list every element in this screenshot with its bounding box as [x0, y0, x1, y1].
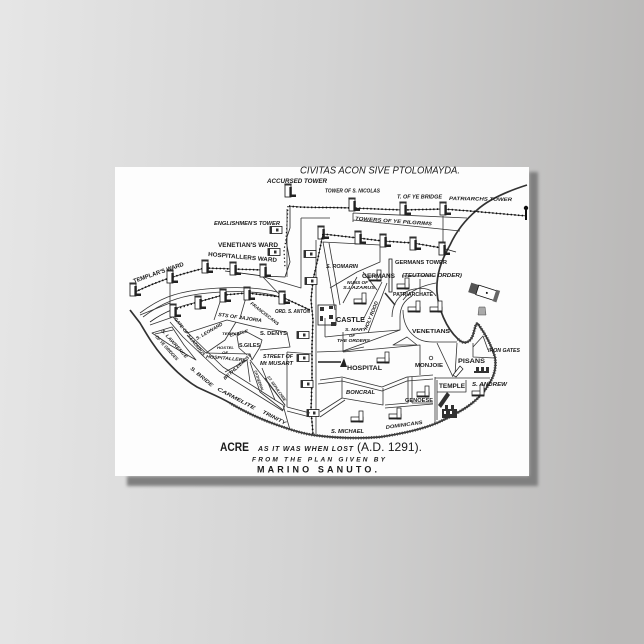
- place labels: FRANCISCANS: [249, 301, 280, 326]
- place labels: HOLY ROOD: [363, 300, 380, 331]
- place labels: S. DENYS: [260, 331, 288, 337]
- canvas: [115, 167, 529, 476]
- place labels: HOSPITAL: [347, 365, 382, 372]
- caption: AS IT WAS WHEN LOST: [257, 446, 354, 453]
- place labels: TOWER OF S. NICOLAS: [325, 188, 381, 194]
- place labels: PISANS: [458, 359, 485, 365]
- place labels: GENOESE: [405, 398, 433, 404]
- buildings: [318, 270, 489, 422]
- map of Acre: [129, 166, 528, 438]
- place labels: OF: [222, 350, 229, 355]
- place labels: PATRIARCHATE: [393, 292, 434, 298]
- place labels: BONCRAL: [346, 390, 375, 396]
- north outer wall with towers: [284, 184, 528, 247]
- place labels: THE ORDERS: [337, 338, 370, 343]
- caption: ACRE: [220, 440, 249, 454]
- place labels: PATRIARCHS TOWER: [449, 196, 513, 203]
- place labels: [133, 178, 521, 435]
- caption: (A.D. 1291).: [357, 440, 422, 454]
- place labels: S.LAZARUS: [343, 285, 375, 290]
- canvas shadow: [127, 172, 538, 486]
- place labels: CATHEDRAL: [253, 370, 265, 392]
- place labels: BETHLEEM ST: [222, 352, 253, 381]
- caption: FROM THE PLAN GIVEN BY: [252, 456, 386, 464]
- caption: [220, 440, 422, 474]
- coastline: [130, 185, 527, 438]
- west wards walls: [129, 206, 330, 322]
- place labels: VENETIANS: [412, 329, 451, 335]
- place labels: CASTLE: [336, 317, 365, 324]
- place labels: S. ROMARIN: [326, 264, 358, 270]
- place labels: DOMINICANS: [385, 420, 424, 431]
- place labels: S. LAWRENCE: [160, 328, 190, 360]
- place labels: TRINITY: [261, 409, 288, 427]
- central town streets: [317, 242, 495, 423]
- main central wall with towers: [297, 234, 323, 434]
- place labels: S. MARY: [345, 327, 367, 332]
- place labels: NUNS OF: [347, 280, 368, 285]
- place labels: ORD. S. ANTON: [275, 309, 310, 315]
- place labels: (TEUTONIC ORDER): [402, 273, 462, 279]
- place labels: S.GILES: [239, 343, 261, 349]
- offshore tower: [468, 282, 500, 302]
- place labels: T. OF YE BRIDGE: [397, 194, 443, 200]
- place labels: CARMELITE: [216, 386, 257, 412]
- place labels: MONJOIE: [415, 363, 444, 369]
- plan title: CIVITAS ACON SIVE PTOLOMAYDA.: [300, 166, 460, 176]
- caption: MARINO SANUTO.: [257, 464, 377, 474]
- place labels: HOSTEL: [217, 345, 235, 350]
- place labels: GERMANS TOWER: [395, 260, 447, 266]
- place labels: S. BRIDE: [189, 366, 215, 389]
- place labels: OF YE GRIDGES: [154, 334, 179, 361]
- place labels: HOSPITALLERS WARD: [208, 252, 278, 264]
- place labels: TEMPLE: [439, 383, 466, 390]
- place labels: GATE OF S.LAZARUS: [173, 317, 206, 357]
- place labels: S. LEONARD: [195, 321, 224, 341]
- place labels: ENGLISHMEN'S TOWER: [214, 221, 280, 227]
- place labels: S. ANDREW: [472, 382, 509, 388]
- small offshore tower: [478, 307, 486, 315]
- place labels: ST. SEPULCHRE: [266, 375, 288, 402]
- place labels: TEMPLAR'S WARD: [133, 262, 185, 285]
- place labels: STS OF JAJORIA: [218, 312, 263, 324]
- place labels: HOSPITALLERS: [206, 354, 246, 362]
- place labels: ACCURSED TOWER: [266, 178, 327, 185]
- place labels: STREET OF: [263, 354, 294, 360]
- place labels: Mt MUSART: [260, 361, 294, 367]
- place labels: IRON GATES: [488, 348, 521, 354]
- place labels: CASTLE: [229, 328, 249, 338]
- second wall with towers: [317, 226, 456, 255]
- place labels: S. MICHAEL: [331, 429, 364, 435]
- place labels: OF: [349, 333, 356, 338]
- place labels: TOWERS OF YE PILGRIMS: [355, 216, 433, 227]
- place labels: GERMANS: [362, 273, 396, 280]
- castle: [318, 305, 336, 326]
- west town streets: [140, 303, 312, 430]
- place labels: TEMPLE: [222, 331, 240, 336]
- place labels: VENETIAN'S WARD: [218, 243, 279, 249]
